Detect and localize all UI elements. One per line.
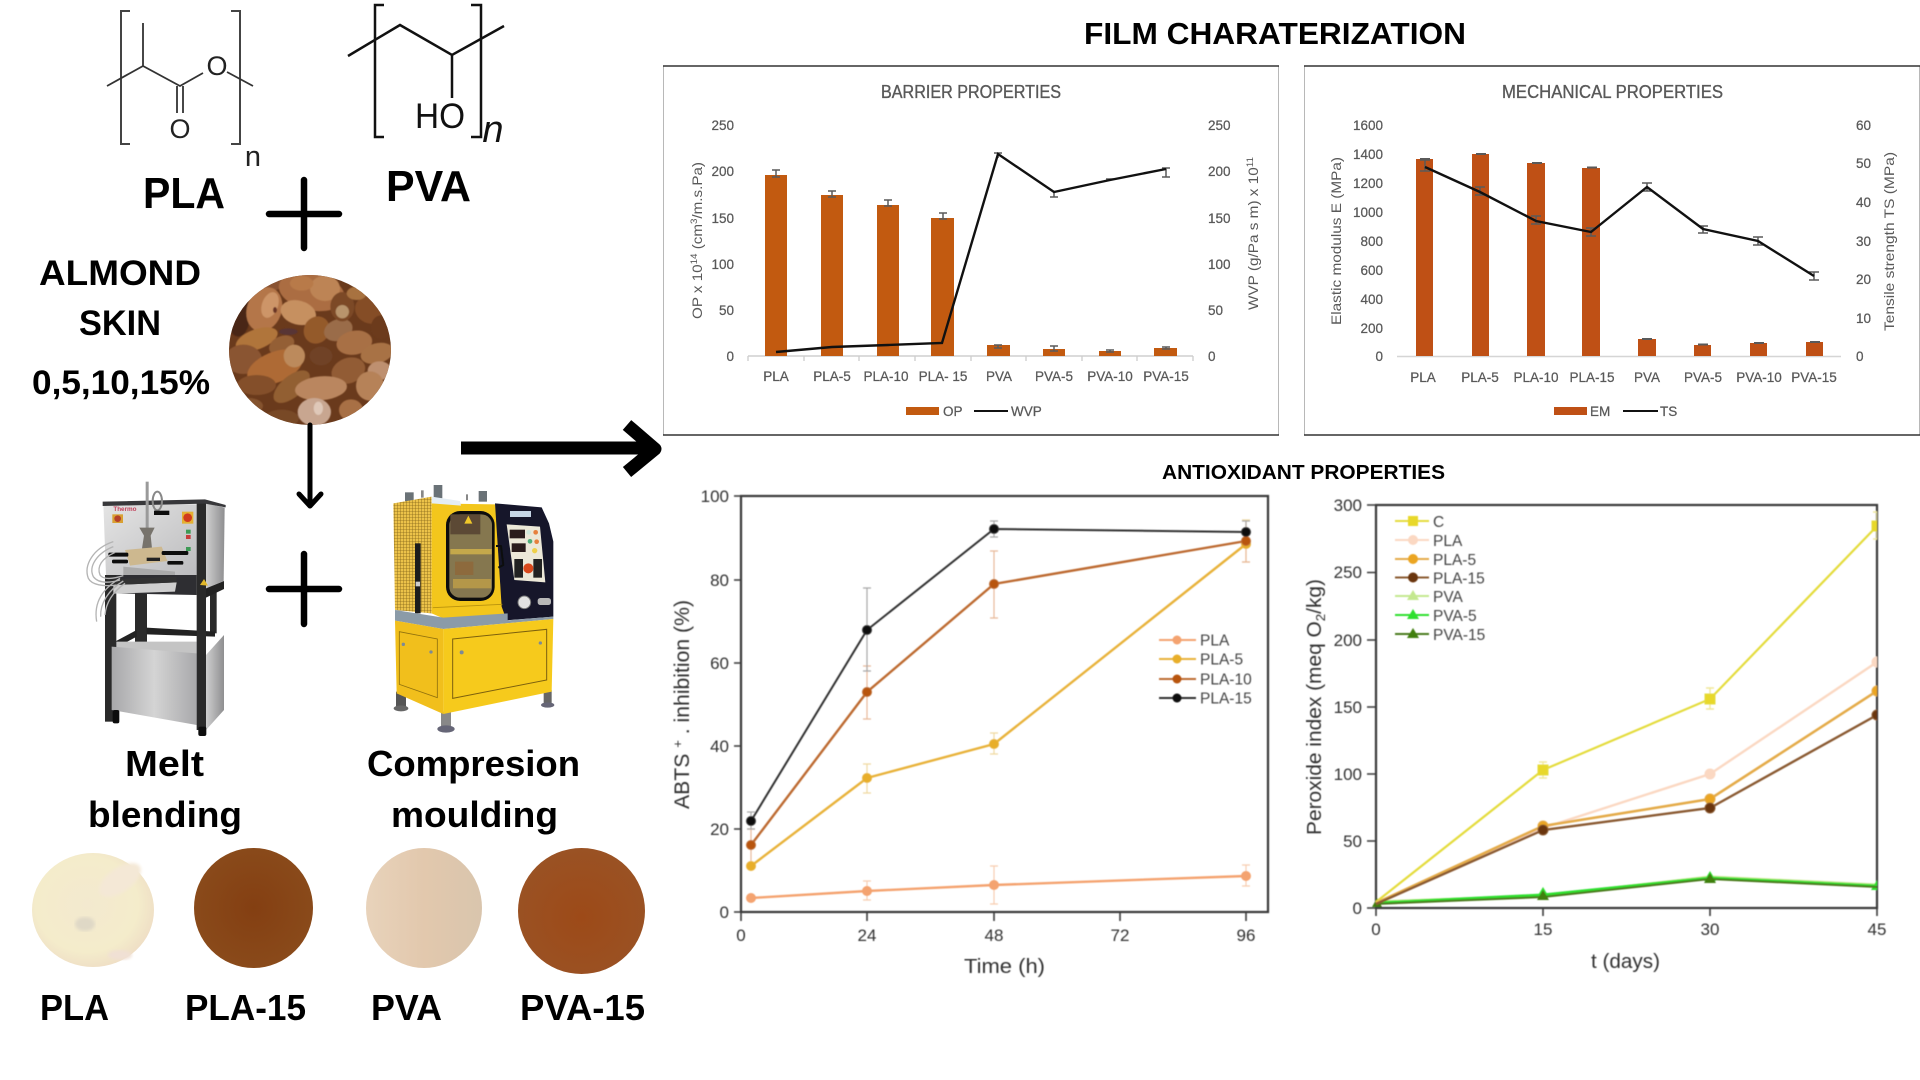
- legend: EM: [1590, 404, 1610, 419]
- category labels: PVA-5: [1035, 369, 1073, 384]
- category labels: PVA-15: [1143, 369, 1189, 384]
- photo: melt blending machine: [87, 482, 226, 736]
- title: FILM CHARATERIZATION: [1084, 16, 1466, 51]
- text block: almond skin: 0,5,10,15%: [32, 364, 210, 402]
- y axis ticks: 0: [720, 903, 729, 922]
- y axis ticks: 250: [1334, 563, 1362, 582]
- text block: almond skin: SKIN: [79, 304, 161, 343]
- panel: barrier properties chart: [663, 66, 1279, 435]
- category labels: PVA: [1634, 370, 1660, 385]
- left axis ticks: 0: [1375, 349, 1383, 364]
- left axis title: /m.s.Pa): [689, 162, 705, 219]
- x axis ticks: 0: [1371, 920, 1381, 939]
- legend: PLA-5: [1200, 652, 1243, 668]
- series PLA: [1376, 657, 1882, 903]
- legend: [906, 404, 1042, 419]
- OP bars: [765, 175, 1177, 356]
- series PLA-15: [1376, 710, 1882, 904]
- label: compression moulding: moulding: [391, 794, 558, 835]
- series PVA-15: [1372, 873, 1877, 907]
- series PLA-5: [746, 540, 1250, 870]
- category labels: PLA: [763, 369, 789, 384]
- chart title: MECHANICAL PROPERTIES: [1502, 82, 1723, 102]
- category labels: PVA-15: [1791, 370, 1837, 385]
- category labels: PVA-5: [1684, 370, 1722, 385]
- axis line: [748, 356, 1193, 361]
- category labels: PLA-5: [1461, 370, 1499, 385]
- line chart: peroxide index: [1303, 496, 1886, 973]
- category labels: PLA-10: [863, 369, 909, 384]
- right axis ticks: 60: [1856, 118, 1871, 133]
- left axis title: (cm: [689, 224, 705, 254]
- error bars: [747, 520, 1250, 904]
- x axis ticks: [736, 926, 1255, 945]
- category labels: [763, 369, 1189, 384]
- text block: almond skin: ALMOND: [39, 254, 201, 293]
- OP error bars: [772, 170, 1170, 352]
- left axis title: 14: [689, 254, 699, 264]
- x axis ticks: 30: [1701, 920, 1719, 939]
- legend: PLA-10: [1200, 672, 1252, 688]
- y axis ticks: 300: [1334, 496, 1362, 515]
- label: compression moulding: Compresion: [367, 743, 580, 784]
- film sample: PVA-15: [518, 848, 645, 974]
- series PLA-10: [746, 536, 1250, 850]
- TS error bars: [1420, 160, 1819, 280]
- chart title: BARRIER PROPERTIES: [881, 82, 1061, 102]
- left axis ticks: 1600: [1353, 118, 1383, 133]
- y axis ticks: 60: [710, 654, 729, 673]
- y axis ticks: [701, 487, 729, 922]
- legend: WVP: [1011, 404, 1042, 419]
- right axis title: 11: [1245, 157, 1255, 167]
- y axis title: /kg): [1303, 579, 1326, 614]
- legend: PVA: [1433, 589, 1464, 606]
- x axis title: Time (h): [964, 955, 1045, 978]
- legend: [1554, 404, 1677, 419]
- chemical structure: PLA: O: [169, 114, 191, 144]
- text block: almond skin: [32, 254, 210, 402]
- chemical structure: PLA: n: [245, 141, 261, 173]
- right axis title: Tensile strength TS (MPa): [1881, 152, 1897, 331]
- heading: antioxidant properties: ANTIOXIDANT PROPERTIES: [1162, 462, 1445, 484]
- text: Thermo brand: Thermo: [113, 506, 137, 513]
- chemical structure: PLA: [107, 11, 261, 173]
- y axis ticks: 100: [1334, 765, 1362, 784]
- legend: PVA-5: [1433, 608, 1477, 625]
- x axis ticks: 0: [736, 926, 746, 945]
- right axis ticks: 0: [1856, 349, 1864, 364]
- film sample: PLA-15: [194, 848, 313, 968]
- chemical structure: PVA: HO: [415, 97, 465, 136]
- legend: OP: [943, 404, 963, 419]
- right axis ticks: 30: [1856, 234, 1871, 249]
- y axis ticks: 50: [1343, 832, 1362, 851]
- label: melt blending: Melt: [125, 743, 204, 784]
- y axis ticks: 20: [710, 820, 729, 839]
- axis line: [1397, 356, 1841, 358]
- label: PLA: PLA: [143, 169, 225, 218]
- legend: PVA-15: [1433, 627, 1485, 644]
- category labels: PVA: [986, 369, 1012, 384]
- legend: TS: [1660, 404, 1677, 419]
- film sample: PLA: [32, 853, 154, 967]
- chemical structure: PVA: n: [482, 109, 504, 151]
- chemical structure: PLA: O: [206, 51, 228, 81]
- y axis ticks: 100: [701, 487, 729, 506]
- right axis ticks: [1208, 118, 1231, 364]
- film sample: PVA: [366, 848, 482, 968]
- arrow: to film characterization: [461, 425, 655, 472]
- label: film PLA: PLA: [40, 987, 109, 1028]
- icon: plus sign top: [269, 180, 339, 248]
- y axis ticks: 200: [1334, 631, 1362, 650]
- TS line: [1425, 167, 1814, 276]
- icon: plus sign bottom: [269, 554, 339, 624]
- category labels: [1410, 370, 1837, 385]
- label: compression moulding: [367, 743, 580, 835]
- legend: [1395, 514, 1485, 644]
- chemical structure: PVA: [348, 5, 504, 151]
- category labels: PLA: [1410, 370, 1436, 385]
- left axis ticks: 600: [1360, 263, 1383, 278]
- x axis ticks: 15: [1534, 920, 1552, 939]
- legend: PLA: [1200, 632, 1230, 650]
- legend: PLA-15: [1433, 570, 1485, 588]
- left axis ticks: [1353, 118, 1383, 364]
- y axis ticks: 40: [710, 737, 729, 756]
- series PVA: [1376, 877, 1877, 902]
- left axis ticks: 0: [726, 349, 734, 364]
- legend: PLA: [1433, 533, 1463, 550]
- y axis ticks: 0: [1353, 899, 1362, 918]
- left axis title: Elastic modulus E (MPa): [1328, 157, 1344, 325]
- left axis ticks: 1000: [1353, 205, 1383, 220]
- series PVA-5: [1376, 871, 1883, 903]
- x axis ticks: 48: [985, 926, 1003, 945]
- EM bars: [1416, 154, 1823, 356]
- label: film PLA-15: PLA-15: [185, 987, 306, 1028]
- WVP line: [776, 154, 1166, 352]
- right axis ticks: 250: [1208, 118, 1231, 133]
- photo: compression moulding press: [393, 485, 554, 733]
- left axis ticks: 200: [711, 164, 734, 179]
- left axis title: 3: [689, 219, 699, 224]
- series PLA: [746, 872, 1250, 902]
- EM error bars: [1420, 154, 1820, 344]
- x axis ticks: 24: [858, 926, 876, 945]
- series C: [1376, 521, 1882, 902]
- left axis ticks: 800: [1360, 234, 1383, 249]
- label: film PVA: PVA: [371, 987, 442, 1028]
- left axis ticks: 400: [1360, 292, 1383, 307]
- line chart: ABTS inhibition: [670, 487, 1268, 978]
- category labels: PLA-5: [813, 369, 851, 384]
- photo: almond skin: [229, 275, 391, 425]
- right axis ticks: 10: [1856, 311, 1871, 326]
- left axis ticks: 250: [711, 118, 734, 133]
- y axis title: . inhibition (%): [671, 600, 694, 740]
- right axis ticks: 20: [1856, 272, 1871, 287]
- x axis title: t (days): [1591, 950, 1660, 973]
- left axis ticks: [711, 118, 734, 364]
- error bars: [1539, 512, 1881, 778]
- left axis ticks: 200: [1360, 321, 1383, 336]
- label: melt blending: blending: [88, 794, 242, 835]
- right axis ticks: 150: [1208, 211, 1231, 226]
- legend: PLA-15: [1200, 690, 1252, 708]
- left axis ticks: 1200: [1353, 176, 1383, 191]
- category labels: PLA-10: [1513, 370, 1559, 385]
- left axis title: OP x 10: [689, 269, 705, 319]
- y axis ticks: [1334, 496, 1362, 918]
- y axis title: 2: [1313, 614, 1328, 621]
- legend: C: [1433, 514, 1444, 531]
- y axis ticks: 80: [710, 571, 729, 590]
- category labels: PLA-15: [1569, 370, 1615, 385]
- right axis ticks: 50: [1208, 303, 1223, 318]
- y axis title: Peroxide index (meq O: [1303, 625, 1326, 835]
- right axis ticks: 50: [1856, 156, 1871, 171]
- series PLA-15: [746, 524, 1250, 826]
- right axis ticks: 40: [1856, 195, 1871, 210]
- left axis ticks: 100: [711, 257, 734, 272]
- label: melt blending: [88, 743, 242, 835]
- right axis title: WVP (g/Pa s m) x 10: [1245, 180, 1261, 310]
- plotted series: [1372, 512, 1883, 907]
- arrow: down from almond skin: [299, 425, 321, 506]
- label: PVA: PVA: [386, 162, 471, 211]
- legend: [1159, 632, 1252, 708]
- y axis title: ABTS: [671, 754, 694, 809]
- x axis ticks: [1371, 920, 1886, 939]
- category labels: PLA- 15: [919, 369, 967, 384]
- right axis ticks: 0: [1208, 349, 1216, 364]
- legend: PLA-5: [1433, 552, 1476, 569]
- right axis ticks: 200: [1208, 164, 1231, 179]
- left axis ticks: 150: [711, 211, 734, 226]
- series PLA-5: [1376, 686, 1882, 903]
- left axis ticks: 50: [719, 303, 734, 318]
- y axis title: +: [670, 740, 685, 748]
- x axis ticks: 96: [1237, 926, 1255, 945]
- right axis ticks: [1856, 118, 1871, 364]
- x axis ticks: 72: [1111, 926, 1129, 945]
- right axis ticks: 100: [1208, 257, 1231, 272]
- panel: mechanical properties chart: [1304, 66, 1920, 435]
- left axis ticks: 1400: [1353, 147, 1383, 162]
- label: film PVA-15: PVA-15: [520, 987, 645, 1028]
- WVP error bars: [994, 153, 1170, 197]
- y axis ticks: 150: [1334, 698, 1362, 717]
- x axis ticks: 45: [1868, 920, 1886, 939]
- category labels: PVA-10: [1736, 370, 1782, 385]
- category labels: PVA-10: [1087, 369, 1133, 384]
